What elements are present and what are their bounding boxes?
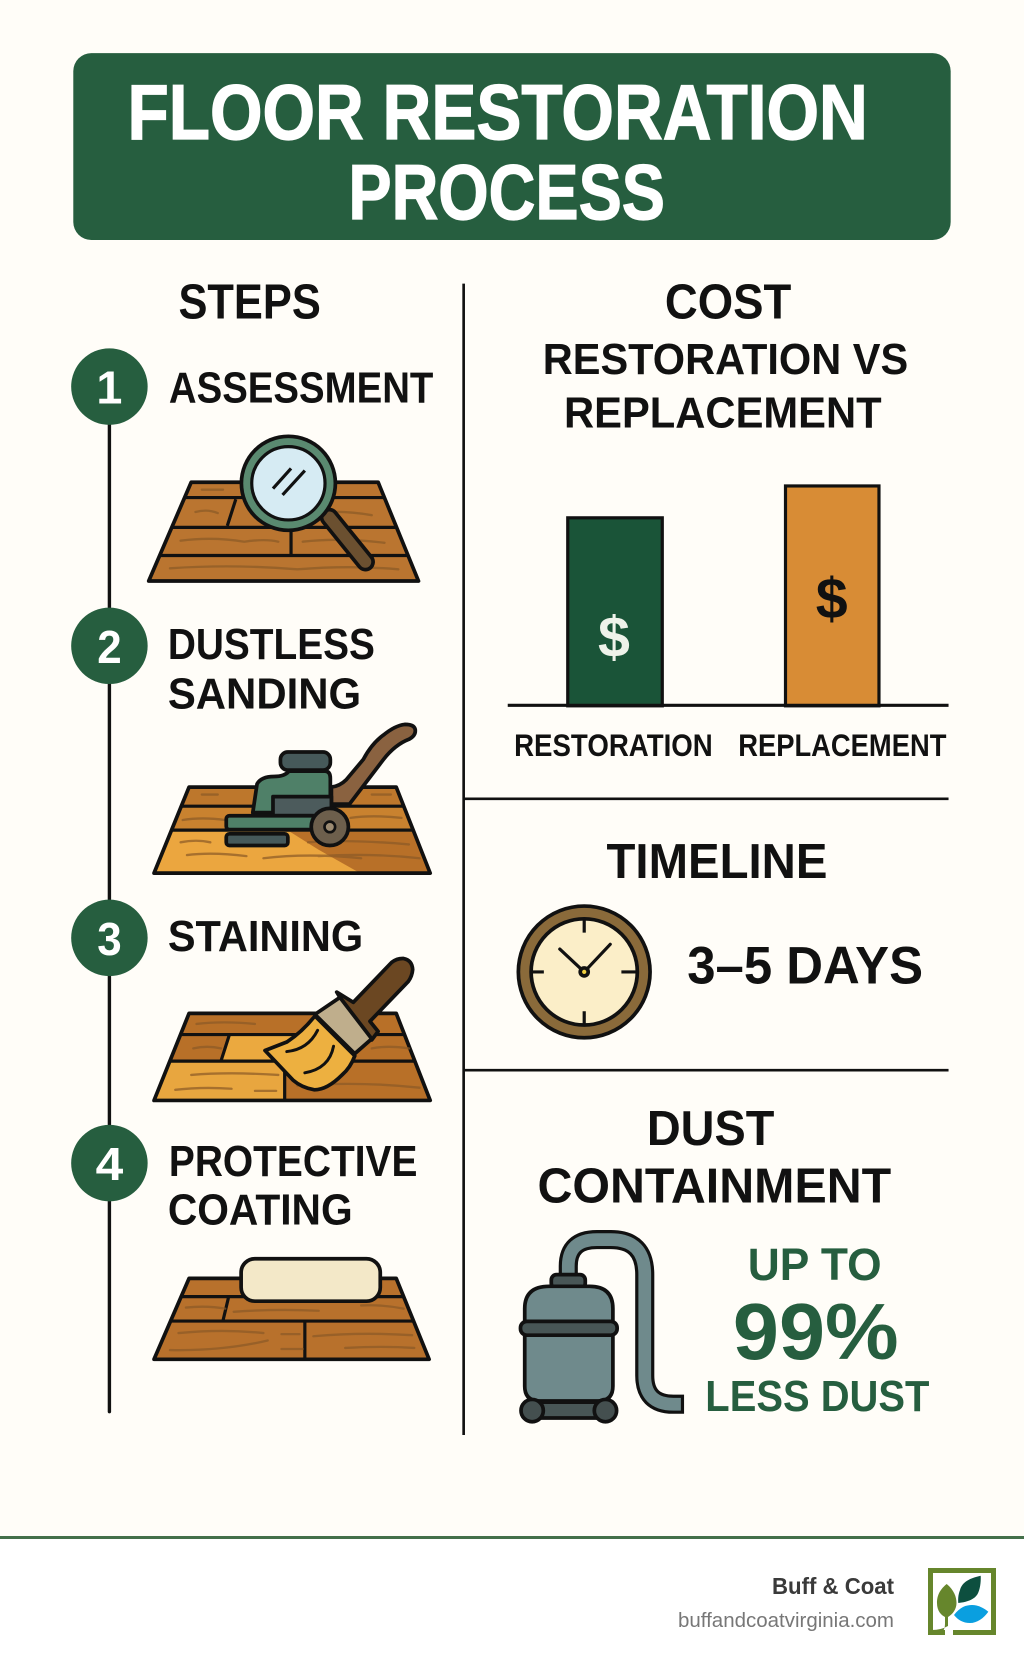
step 1: assessment: 1 [96, 362, 122, 414]
step 3: staining [71, 900, 430, 1100]
brand name: Buff & Coat [772, 1573, 894, 1599]
panel: cost comparison: COST [665, 276, 791, 330]
step 2: dustless sanding: DUSTLESS [168, 621, 375, 669]
dust reduction statistic: LESS DUST [705, 1373, 930, 1421]
panel: timeline: 3–5 DAYS [687, 937, 923, 996]
icon: logo [930, 1570, 994, 1635]
dust reduction statistic [705, 1239, 930, 1421]
step 2: dustless sanding [71, 608, 430, 873]
panel: dust containment [520, 1102, 930, 1422]
icon: clock [518, 906, 650, 1038]
bar chart: RESTORATION [514, 727, 713, 763]
column divider [462, 284, 465, 1435]
icon: floor with magnifying glass [149, 434, 419, 581]
panel: timeline: TIMELINE [607, 835, 827, 889]
dust reduction statistic: 99% [733, 1287, 899, 1376]
icon: floor with sander [154, 724, 430, 873]
step 2: dustless sanding: 2 [97, 621, 122, 673]
step 3: staining: STAINING [168, 913, 363, 961]
icon: vacuum [520, 1240, 684, 1422]
step 2: dustless sanding: SANDING [168, 670, 361, 718]
icon: floor with coating [154, 1259, 429, 1359]
bar chart: $ [598, 605, 630, 669]
title banner: PROCESS [348, 150, 665, 236]
panel: cost comparison: REPLACEMENT [564, 390, 882, 438]
step 1: assessment [71, 348, 434, 581]
title banner [73, 53, 951, 240]
panel: dust containment: DUST [647, 1102, 774, 1156]
icon: floor with paint brush [154, 958, 430, 1100]
panel: cost comparison: RESTORATION VS [543, 336, 908, 384]
dust reduction statistic: UP TO [748, 1239, 882, 1290]
panel: cost comparison [508, 276, 949, 763]
footer [0, 1536, 1024, 1666]
step 4: protective coating [71, 1125, 429, 1359]
step 1: assessment: ASSESSMENT [169, 365, 434, 413]
panel: timeline [518, 835, 923, 1038]
step 4: protective coating: 4 [96, 1138, 123, 1190]
bar chart: $ [816, 567, 848, 631]
step 4: protective coating: COATING [168, 1187, 353, 1235]
panel: steps column [71, 276, 434, 1412]
website: buffandcoatvirginia.com [678, 1610, 894, 1632]
title banner: FLOOR RESTORATION [127, 70, 868, 156]
bar chart: REPLACEMENT [738, 727, 947, 763]
panel: dust containment: CONTAINMENT [537, 1159, 891, 1213]
steps timeline line [108, 387, 111, 1412]
heading: steps: STEPS [178, 276, 321, 330]
bar chart [508, 486, 949, 763]
step 3: staining: 3 [97, 913, 122, 965]
step 4: protective coating: PROTECTIVE [169, 1138, 417, 1186]
